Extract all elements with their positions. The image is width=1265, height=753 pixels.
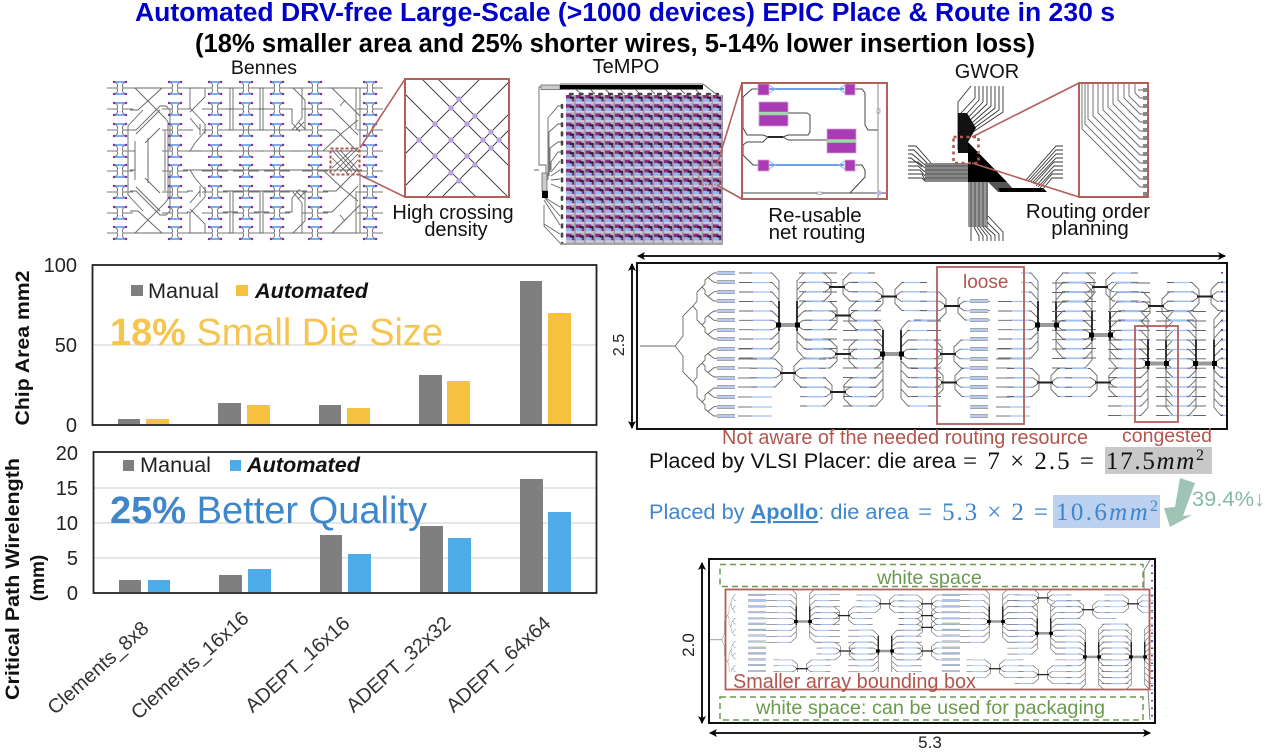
Apollo equation: = 5.3 × 2 = [918,499,1048,526]
legend [123,454,361,477]
TeMPO routing diagram [534,84,723,244]
panel: Bennes layout [107,46,514,241]
zoom connector lines [972,83,1079,197]
gridline [93,344,596,346]
legend: Manual [148,280,219,303]
width arrow [638,255,1225,257]
zoom marker [330,148,360,174]
zoom marker [954,137,978,163]
zoom connector lines [360,79,405,197]
height label: 2.5 [611,334,628,356]
zoom inset: re-usable net [742,83,887,199]
highlight: Apollo area [1053,495,1160,528]
frame [94,452,596,593]
caption: High crossing [392,202,514,224]
y axis ticks: 15 [56,478,78,500]
zoom connector lines [717,83,742,199]
VLSI placer equation [649,447,1204,475]
white space label: white space [876,567,982,589]
legend: Automated [254,280,369,303]
top white space box [720,564,1143,586]
callout box: loose [937,267,1024,424]
callout box: congested [1135,326,1178,422]
frame [709,559,1155,723]
y axis ticks: 5 [67,548,78,570]
caption [1026,200,1150,240]
y axis title: Critical Path Wirelength [3,458,24,700]
chart: chip area [13,255,596,437]
Apollo equation: Placed by Apollo: die area [649,501,909,524]
panel: TeMPO layout [534,56,887,244]
VLSI placer equation: = 7 × 2.5 = [963,448,1094,475]
bottom white space box [720,697,1143,720]
frame [637,263,1227,429]
height arrow [631,264,633,428]
title line 2: (18% smaller area and 25% shorter wires, 5-14% lower insertion loss) [195,30,1035,58]
x axis labels: Clements_8x8 [44,617,153,719]
VLSI placer equation: Placed by VLSI Placer: die area [649,450,956,473]
array bounding box [726,590,1150,690]
y axis ticks: 0 [67,583,78,605]
x axis labels: ADEPT_16x16 [241,612,354,717]
Bennes heading: Bennes [231,57,297,79]
y axis ticks: 20 [56,443,78,465]
title [135,0,1115,58]
legend: Automated [246,454,361,477]
zoom marker [699,165,720,185]
y axis ticks [56,443,78,605]
Apollo equation [649,498,1158,526]
GWOR routing diagram [908,86,1063,241]
y axis title: (mm) [28,555,49,601]
panel: VLSI placer layout [611,256,1254,449]
chart: critical path wirelength [3,443,596,724]
width label: 5.3 [918,733,942,752]
caption: planning [1051,217,1129,240]
caption [768,204,865,244]
y axis ticks: 10 [56,513,78,535]
y axis title [3,458,49,700]
arrow: reduction [1164,478,1195,527]
callout: 18% Small Die Size [110,312,443,354]
placed schematic [710,560,1175,720]
width arrow [710,732,1150,734]
legend [131,280,369,303]
annotation: routing resource: Not aware of the needed routing resource [722,427,1088,449]
y axis ticks: 100 [44,255,77,277]
panel: Apollo layout [679,559,1175,752]
zoom inset: crossings [404,78,510,198]
panel: GWOR layout [908,61,1150,241]
legend: Manual [140,454,211,477]
caption: net routing [769,221,865,244]
y axis ticks [44,255,77,437]
x axis labels: ADEPT_32x32 [342,612,455,717]
zoom inset: routing order [1079,83,1148,197]
TeMPO heading: TeMPO [593,56,659,78]
y axis ticks: 0 [66,415,77,437]
x axis labels: ADEPT_64x64 [442,612,555,717]
packaging label: white space: can be used for packaging [755,697,1105,719]
x axis labels [44,607,555,724]
VLSI placer equation: 17.5mm [1106,448,1194,475]
x axis labels: Clements_16x16 [127,607,253,724]
y axis title: Chip Area mm2 [13,270,34,426]
reduction label: 39.4%↓ [1192,488,1265,511]
Apollo equation: 2 [1150,498,1158,515]
frame [92,265,596,425]
bounding box label: Smaller array bounding box [733,671,976,693]
bars [118,281,571,424]
y axis ticks: 50 [55,335,77,357]
Bennes routing diagram [107,82,383,239]
caption: density [424,219,488,241]
caption [392,202,514,241]
die area comparison [649,447,1265,528]
gridlines [93,488,596,558]
caption: Re-usable [768,204,862,227]
VLSI placer equation: 2 [1196,447,1204,464]
caption: Routing order [1026,200,1150,223]
bars [119,479,571,592]
GWOR heading: GWOR [955,61,1019,83]
loose label: loose [963,272,1008,293]
height arrow [701,563,703,723]
highlight: VLSI area [1105,447,1212,474]
placed schematic [640,268,1254,418]
callout: 25% Better Quality [110,490,427,532]
Apollo equation: 10.6mm [1056,499,1148,526]
height label: 2.0 [679,633,698,657]
congested label: congested [1122,425,1212,447]
